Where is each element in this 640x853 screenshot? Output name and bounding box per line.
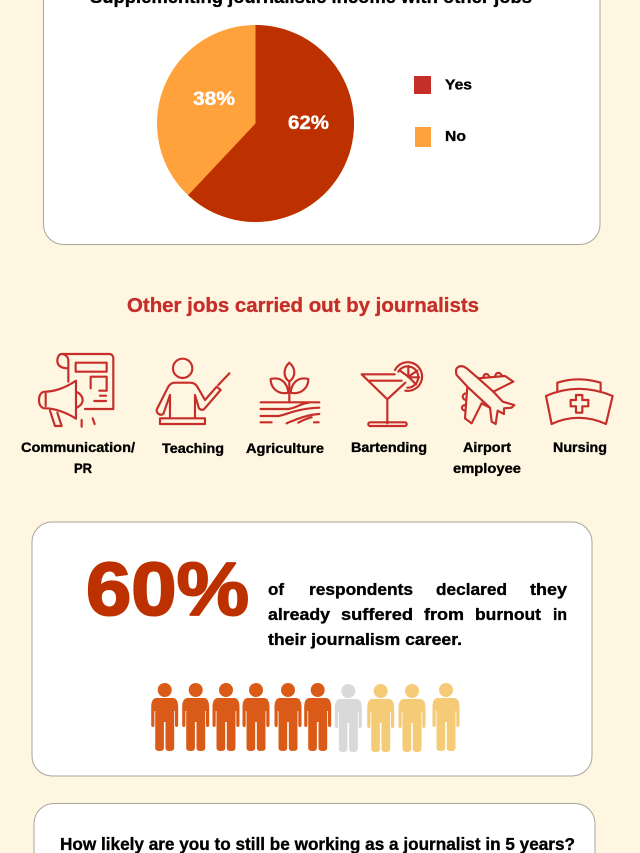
icon: cocktail [362,362,422,426]
job: communication / PR [21,354,135,476]
label: PR [74,460,92,476]
panel: likelihood of staying in journalism [34,804,595,853]
statement text: in [553,606,567,624]
label [453,439,521,476]
icon: plant and field [261,363,319,423]
job: agriculture [246,363,324,456]
label: Nursing [553,439,607,455]
pictogram: 6 of 10 people [151,683,459,752]
statement text: respondents [309,581,413,599]
label: Agriculture [246,440,324,456]
big number: 60% [86,547,249,631]
label: employee [453,460,521,476]
panel: burnout statistic [32,522,592,776]
pie chart: 38% [193,89,235,110]
statement text: burnout [475,606,542,624]
job: nursing [546,379,613,455]
legend: No [445,128,466,145]
job: teaching [157,359,229,456]
statement text: they [530,581,568,599]
icon: teacher [157,359,229,424]
label: Teaching [162,440,224,456]
statement text: already [268,606,331,624]
pie chart: 62% [288,113,329,134]
statement text: from [424,606,464,624]
pie chart [157,25,354,222]
statement text: declared [436,581,507,599]
statement text: their journalism career. [268,631,462,649]
job: bartending [351,362,427,455]
statement text [268,581,568,649]
icon: plane [456,366,514,424]
statement text: suffered [341,606,413,624]
statement text: of [268,581,285,599]
panel: supplementing income [44,0,600,244]
label: Bartending [351,439,427,455]
label: Communication/ [21,439,135,455]
label [21,439,135,476]
job: airport employee [453,366,521,476]
label: Airport [463,439,511,455]
icon: nurse cap [546,379,613,424]
heading: other jobs: Other jobs carried out by journalists [127,295,479,317]
legend: Yes [445,76,472,94]
icon: newsletter and megaphone [39,354,113,427]
legend [414,76,472,147]
